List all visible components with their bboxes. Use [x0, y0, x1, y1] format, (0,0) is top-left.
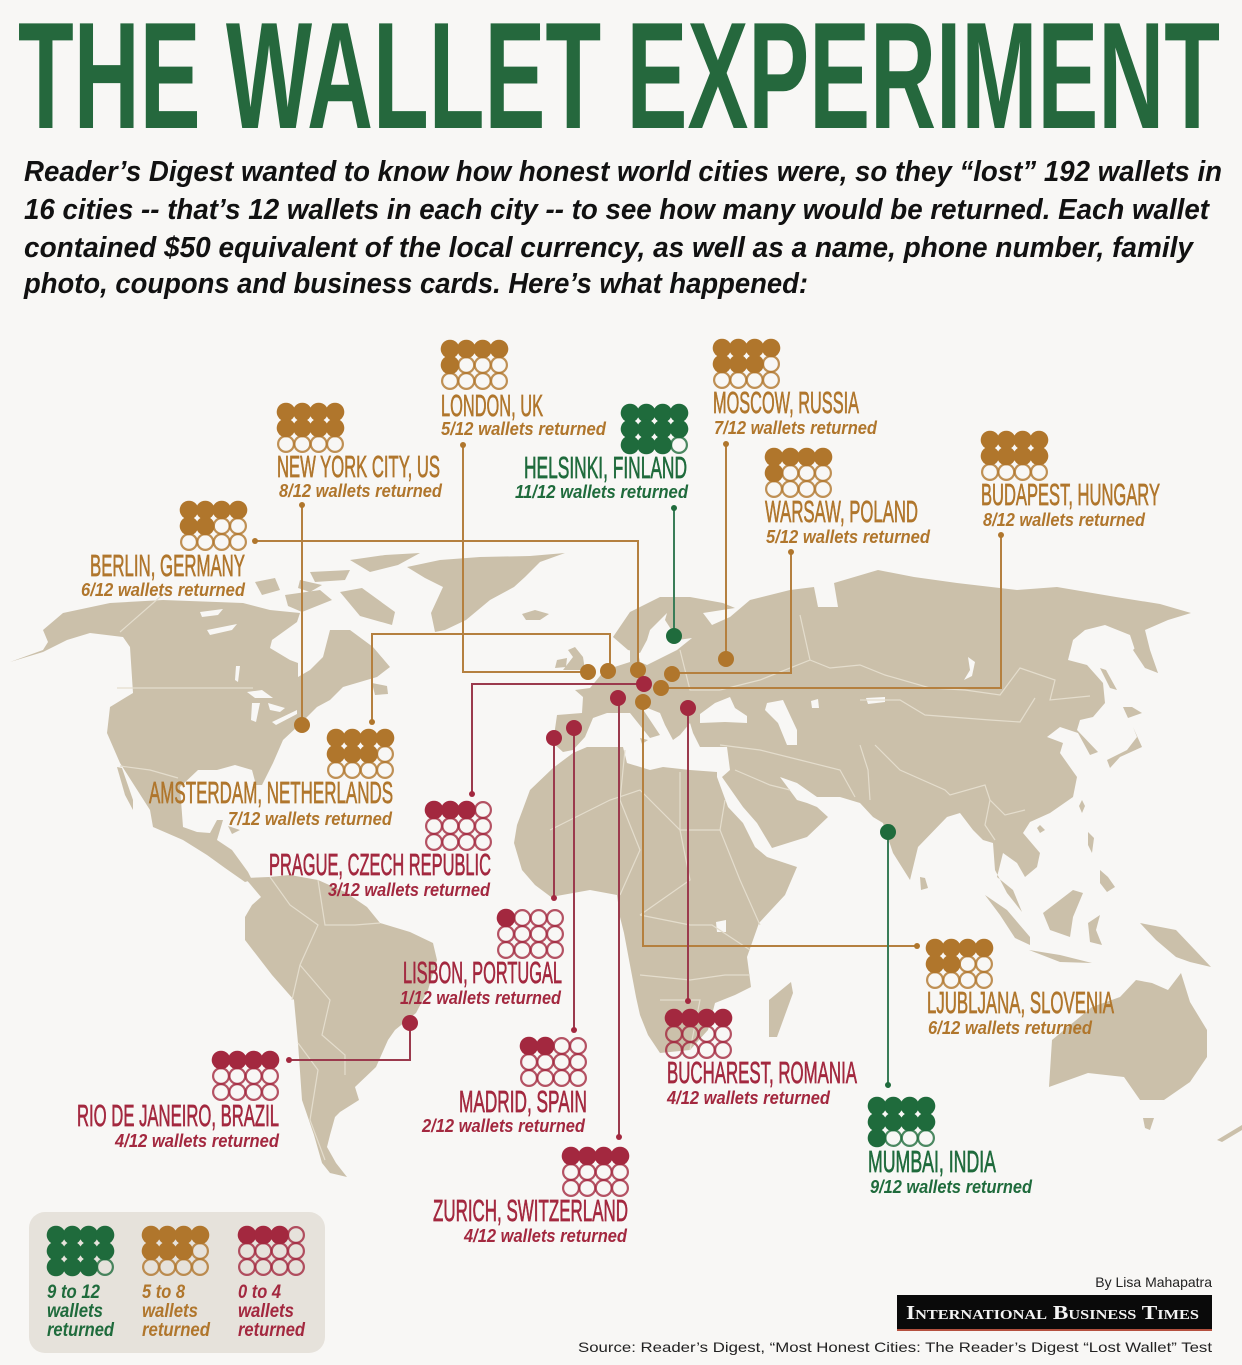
connector end points: [252, 441, 1004, 1140]
city: Lisbon: 1/12 wallets returned: [400, 987, 562, 1008]
southeast asian islands: [1140, 923, 1211, 967]
city: Budapest: 8/12 wallets returned: [983, 509, 1146, 530]
byline: By Lisa Mahapatra: [1095, 1274, 1212, 1290]
city: Zurich: [433, 1147, 629, 1246]
iceland: [522, 610, 549, 620]
intro text block: [23, 156, 1222, 300]
world map: [10, 553, 1242, 1177]
south america: [245, 875, 437, 1177]
legend panel: wallets: [47, 1301, 103, 1322]
city: Mumbai: [868, 1097, 1033, 1197]
city location markers: [294, 628, 896, 1031]
city: Prague: 3/12 wallets returned: [328, 879, 491, 900]
city: Berlin: BERLIN, GERMANY: [90, 548, 245, 583]
city: New York: 8/12 wallets returned: [279, 480, 443, 501]
greenland: [407, 553, 565, 632]
connector lines: [255, 444, 1001, 1137]
city: Amsterdam: [149, 729, 394, 829]
source line: Source: Reader’s Digest, “Most Honest Cities: The Reader’s Digest “Lost Wallet” Test: [578, 1339, 1212, 1355]
city: Warsaw: WARSAW, POLAND: [765, 494, 918, 529]
logo: International Business Times: [897, 1295, 1212, 1331]
city: Prague: PRAGUE, CZECH REPUBLIC: [269, 847, 491, 882]
arctic islands: [350, 553, 420, 572]
logo: International Business Times: International Business Times: [906, 1302, 1199, 1324]
city: Helsinki: 11/12 wallets returned: [515, 481, 689, 502]
city: Helsinki: HELSINKI, FINLAND: [524, 450, 687, 485]
city: Prague: [269, 801, 491, 900]
legend panel: 0 to 4: [238, 1282, 281, 1303]
east asian islands: [1100, 668, 1117, 690]
city: Amsterdam: 7/12 wallets returned: [228, 808, 393, 829]
intro text block: 16 cities -- that’s 12 wallets in each city -- to see how many would be returned. Each wallet: [24, 194, 1210, 226]
city: Moscow: [713, 339, 878, 438]
intro text block: photo, coupons and business cards. Here’s what happened:: [23, 268, 808, 300]
legend panel: returned: [238, 1320, 305, 1341]
city: London: 5/12 wallets returned: [441, 418, 607, 439]
city: Madrid: [421, 1037, 587, 1136]
intro text block: contained $50 equivalent of the local currency, as well as a name, phone number, family: [24, 232, 1195, 264]
city: Mumbai: 9/12 wallets returned: [870, 1176, 1033, 1197]
city: Bucharest: 4/12 wallets returned: [666, 1087, 831, 1108]
lakes and inland seas: [200, 609, 975, 932]
city: Ljubljana: 6/12 wallets returned: [928, 1017, 1093, 1038]
city: Lisbon: LISBON, PORTUGAL: [403, 955, 562, 990]
city: Amsterdam: AMSTERDAM, NETHERLANDS: [149, 775, 393, 810]
eurasia: [553, 570, 1191, 912]
nova scotia: [372, 683, 388, 695]
legend panel: 9 to 12: [47, 1282, 100, 1303]
legend panel: 5 to 8: [142, 1282, 185, 1303]
city: Madrid: 2/12 wallets returned: [421, 1115, 586, 1136]
city: Mumbai: MUMBAI, INDIA: [868, 1144, 996, 1179]
city: Berlin: 6/12 wallets returned: [81, 579, 246, 600]
legend panel: returned: [142, 1320, 210, 1341]
legend panel: wallets: [142, 1301, 198, 1322]
legend panel: returned: [47, 1320, 114, 1341]
city: Rio de Janeiro: [77, 1051, 280, 1151]
city: Zurich: 4/12 wallets returned: [463, 1225, 628, 1246]
madagascar: [769, 982, 793, 1037]
city: Bucharest: [665, 1009, 857, 1108]
city: Berlin: [81, 501, 247, 600]
city: Moscow: MOSCOW, RUSSIA: [713, 385, 859, 420]
north america: [10, 600, 390, 882]
city: Warsaw: [765, 448, 931, 547]
city: Zurich: ZURICH, SWITZERLAND: [433, 1193, 628, 1228]
city: Budapest: [981, 431, 1160, 530]
legend panel: [29, 1212, 325, 1353]
africa: [514, 747, 797, 1053]
british isles: [563, 647, 585, 670]
city: Lisbon: [400, 909, 563, 1008]
city: New York: [277, 403, 443, 501]
city: London: [441, 340, 607, 439]
baja california: [117, 767, 133, 810]
australia: [1049, 973, 1207, 1100]
city: Moscow: 7/12 wallets returned: [714, 417, 878, 438]
city: Warsaw: 5/12 wallets returned: [766, 526, 931, 547]
city: Helsinki: [515, 404, 689, 502]
city: Rio de Janeiro: RIO DE JANEIRO, BRAZIL: [77, 1098, 279, 1133]
city: Madrid: MADRID, SPAIN: [459, 1084, 587, 1119]
city: London: LONDON, UK: [441, 388, 543, 423]
city: Bucharest: BUCHAREST, ROMANIA: [667, 1055, 857, 1090]
city: New York: NEW YORK CITY, US: [277, 449, 440, 484]
legend panel: wallets: [238, 1301, 294, 1322]
city: Ljubljana: [926, 939, 1114, 1038]
city: Rio de Janeiro: 4/12 wallets returned: [114, 1130, 280, 1151]
country borders: [117, 590, 1090, 1160]
